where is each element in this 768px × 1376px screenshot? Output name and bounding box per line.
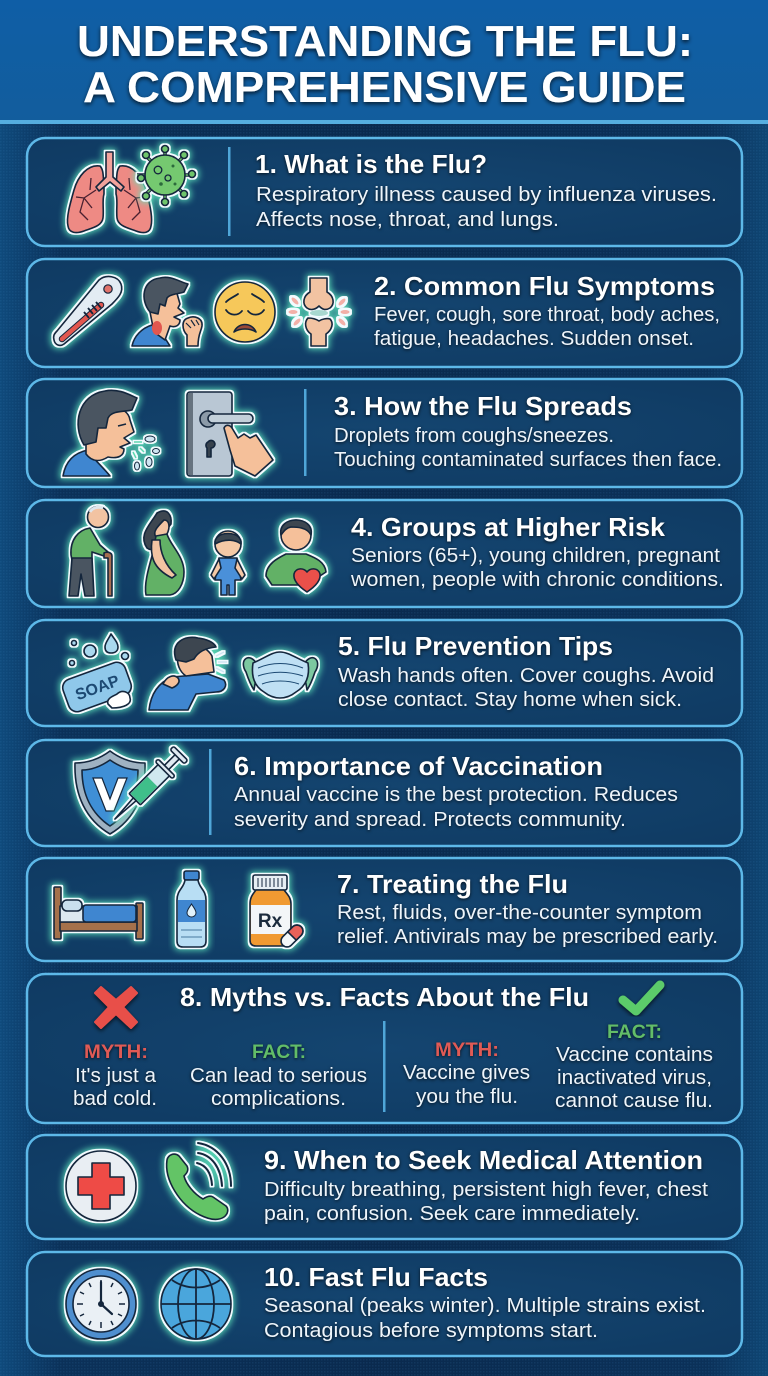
text 6	[234, 784, 678, 831]
icon: soap and bubbles	[60, 634, 134, 714]
icon: syringe	[106, 745, 189, 828]
icon: bed	[54, 887, 143, 939]
text 2: Fever, cough, sore throat, body aches,	[374, 304, 720, 326]
icon: prescription bottle and capsule: Rx	[258, 911, 283, 932]
text 10	[264, 1295, 706, 1342]
heading 10: 10. Fast Flu Facts	[264, 1262, 488, 1292]
myth 1: MYTH:	[84, 1042, 148, 1063]
fact 2: cannot cause flu.	[555, 1090, 713, 1112]
text 10: Contagious before symptoms start.	[264, 1320, 598, 1342]
panel 2: common flu symptoms	[27, 259, 742, 367]
text 5: Wash hands often. Cover coughs. Avoid	[338, 665, 714, 687]
icon: adult with heart	[266, 520, 326, 592]
panel 10: fast flu facts	[27, 1252, 742, 1356]
icon: pregnant woman	[144, 511, 184, 595]
text 9: Difficulty breathing, persistent high fever, chest	[264, 1179, 708, 1201]
title: UNDERSTANDING THE FLU:	[77, 17, 693, 66]
panel 5: flu prevention tips	[27, 620, 742, 726]
panel 7: treating the flu	[27, 858, 742, 961]
text 3: Touching contaminated surfaces then face.	[334, 449, 722, 471]
myth 2: Vaccine gives	[403, 1062, 530, 1084]
title: A COMPREHENSIVE GUIDE	[83, 63, 686, 112]
myth 2: you the flu.	[416, 1086, 518, 1108]
icon: red cross mark	[95, 987, 137, 1028]
panel 4: groups at higher risk	[27, 500, 742, 607]
text 7: relief. Antivirals may be prescribed early.	[337, 926, 718, 948]
fact 2: FACT:	[607, 1022, 662, 1043]
text 7: Rest, fluids, over-the-counter symptom	[337, 902, 702, 924]
icon: phone with signal	[167, 1154, 228, 1219]
fact 2: inactivated virus,	[557, 1067, 712, 1089]
panel 8: myths vs facts	[27, 974, 742, 1123]
header banner	[0, 0, 768, 124]
fact 1	[190, 1042, 367, 1110]
heading 2: 2. Common Flu Symptoms	[374, 271, 715, 301]
myth 1: It's just a	[75, 1065, 157, 1087]
myth 1: bad cold.	[73, 1088, 157, 1110]
panel 3: how the flu spreads	[27, 379, 742, 487]
icon: phone signal arcs	[197, 1143, 231, 1186]
fact 1: Can lead to serious	[190, 1065, 367, 1087]
text 9: pain, confusion. Seek care immediately.	[264, 1203, 640, 1225]
fact 1: complications.	[211, 1088, 346, 1110]
heading 7: 7. Treating the Flu	[337, 869, 568, 899]
heading 9: 9. When to Seek Medical Attention	[264, 1145, 703, 1175]
text 6: Annual vaccine is the best protection. Reduces	[234, 784, 678, 806]
icon: child	[211, 531, 245, 595]
fact 2	[555, 1022, 713, 1112]
text 7	[337, 902, 718, 948]
fact 2: Vaccine contains	[556, 1044, 713, 1066]
panel 1: what is the flu	[27, 138, 742, 246]
icon: green check mark	[623, 985, 660, 1011]
heading 5: 5. Flu Prevention Tips	[338, 631, 613, 661]
myth 2: MYTH:	[435, 1040, 499, 1061]
text 4: Seniors (65+), young children, pregnant	[351, 545, 720, 567]
text 2	[374, 304, 720, 350]
heading 1: 1. What is the Flu?	[255, 149, 487, 179]
icon: soap and bubbles: SOAP	[73, 673, 122, 704]
text 1: Affects nose, throat, and lungs.	[256, 209, 559, 231]
myth 1	[73, 1042, 157, 1110]
panel 6: importance of vaccination	[27, 740, 742, 846]
icon: globe	[161, 1269, 231, 1339]
myth 2	[403, 1040, 530, 1108]
icon: prescription bottle and capsule	[250, 875, 305, 949]
icon: senior with cane	[69, 506, 112, 596]
icon: face mask	[243, 652, 318, 698]
icon: person sneezing	[63, 390, 160, 476]
heading 3: 3. How the Flu Spreads	[334, 391, 632, 421]
text 6: severity and spread. Protects community.	[234, 809, 626, 831]
text 5	[338, 665, 714, 711]
panel 9: when to seek medical attention	[27, 1135, 742, 1239]
text 1: Respiratory illness caused by influenza viruses.	[256, 184, 717, 206]
icon: door handle and hand	[187, 392, 273, 476]
text 4	[350, 545, 724, 591]
icon: medical cross	[66, 1151, 136, 1221]
icon: lungs	[67, 152, 152, 233]
icon: thermometer	[54, 277, 122, 345]
icon: coughing person	[132, 277, 202, 346]
text 2: fatigue, headaches. Sudden onset.	[374, 328, 694, 350]
icon: virus	[137, 146, 196, 206]
icon: shield with V	[75, 751, 145, 834]
text 9	[264, 1179, 708, 1225]
text 3	[334, 425, 722, 471]
title	[77, 17, 693, 112]
icon: water bottle	[177, 871, 206, 947]
heading 4: 4. Groups at Higher Risk	[351, 512, 666, 542]
icon: tired face	[215, 282, 275, 342]
text 4: women, people with chronic conditions.	[350, 569, 724, 591]
text 5: close contact. Stay home when sick.	[338, 689, 682, 711]
icon: sore knee joint	[288, 278, 350, 346]
icon: coughing into elbow	[149, 637, 227, 710]
text 10: Seasonal (peaks winter). Multiple strains exist.	[264, 1295, 706, 1317]
icon: clock	[66, 1269, 136, 1339]
text 3: Droplets from coughs/sneezes.	[334, 425, 614, 447]
fact 1: FACT:	[252, 1042, 306, 1063]
text 1	[256, 184, 717, 231]
heading 8: 8. Myths vs. Facts About the Flu	[180, 982, 589, 1012]
heading 6: 6. Importance of Vaccination	[234, 751, 603, 781]
